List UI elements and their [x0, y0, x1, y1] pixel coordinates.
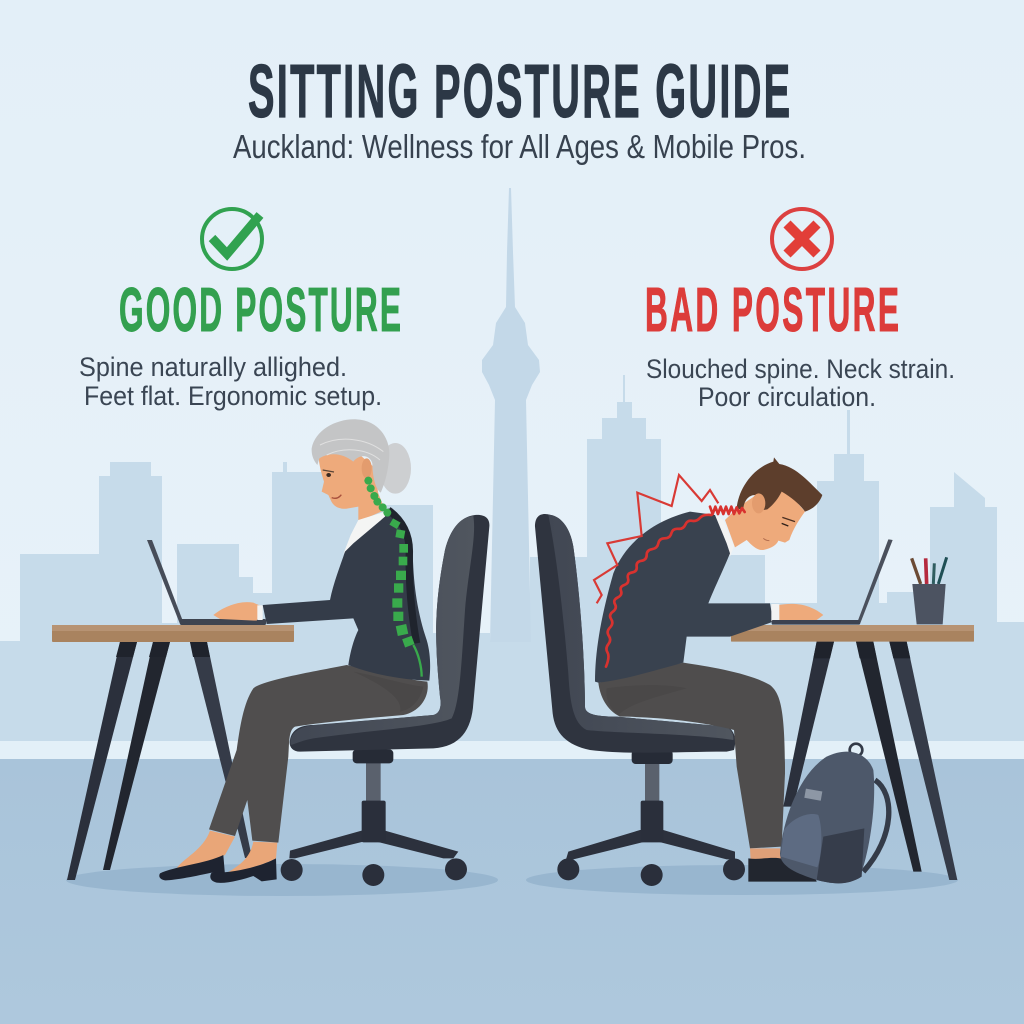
- woman: feet and shoes: [159, 831, 277, 883]
- icon: red cross: [772, 209, 832, 269]
- text: bad posture description: Poor circulation.: [698, 382, 876, 412]
- skyline: Auckland city silhouette: [0, 188, 1024, 742]
- icon: green check: [202, 209, 262, 269]
- bad spine: red squiggle: [606, 507, 745, 667]
- text: good posture description: Feet flat. Ergonomic setup.: [84, 381, 382, 411]
- window sill strip: [0, 741, 1024, 760]
- woman: trousers: [209, 665, 428, 843]
- bad posture scene: chair, man, laptop, backpack: [535, 457, 947, 886]
- woman: head and neck: [312, 419, 411, 522]
- text: bad posture description: [646, 354, 955, 412]
- laptop: left: [147, 540, 266, 625]
- backpack: [780, 744, 889, 883]
- title: SITTING POSTURE GUIDE: [248, 50, 790, 133]
- floor: [0, 759, 1024, 1024]
- office chair: [535, 514, 745, 886]
- woman: jacket: [263, 508, 430, 681]
- woman: hand and cuff: [213, 602, 263, 621]
- pain lightning outline: [594, 475, 718, 603]
- man: hand and cuff: [771, 604, 823, 621]
- man: shoe: [748, 848, 817, 882]
- man: white collar: [715, 515, 734, 557]
- Sky Tower: [482, 188, 540, 642]
- text: bad posture description: Slouched spine. Neck strain.: [646, 354, 955, 384]
- desk: right: [731, 625, 974, 880]
- man: jacket: [595, 512, 773, 683]
- laptop: [772, 539, 893, 625]
- text: good posture description: [79, 352, 382, 411]
- woman: white collar: [343, 512, 387, 554]
- floor shadow: left: [66, 864, 498, 896]
- desk: left: [52, 625, 294, 880]
- good spine: green vertebrae: [364, 477, 422, 677]
- heading: bad posture: BAD POSTURE: [645, 276, 899, 345]
- subtitle: Auckland: Wellness for All Ages & Mobile Pros.: [233, 128, 806, 165]
- office chair: [281, 515, 489, 886]
- text: good posture description: Spine naturally allighed.: [79, 352, 347, 382]
- heading: good posture: GOOD POSTURE: [119, 276, 401, 345]
- floor shadow: right: [526, 865, 958, 895]
- good posture scene: chair and woman: [159, 419, 489, 886]
- man: head and neck: [725, 457, 822, 550]
- pen cup: [912, 557, 947, 624]
- background wall: [0, 0, 1024, 760]
- man: trousers: [598, 663, 785, 848]
